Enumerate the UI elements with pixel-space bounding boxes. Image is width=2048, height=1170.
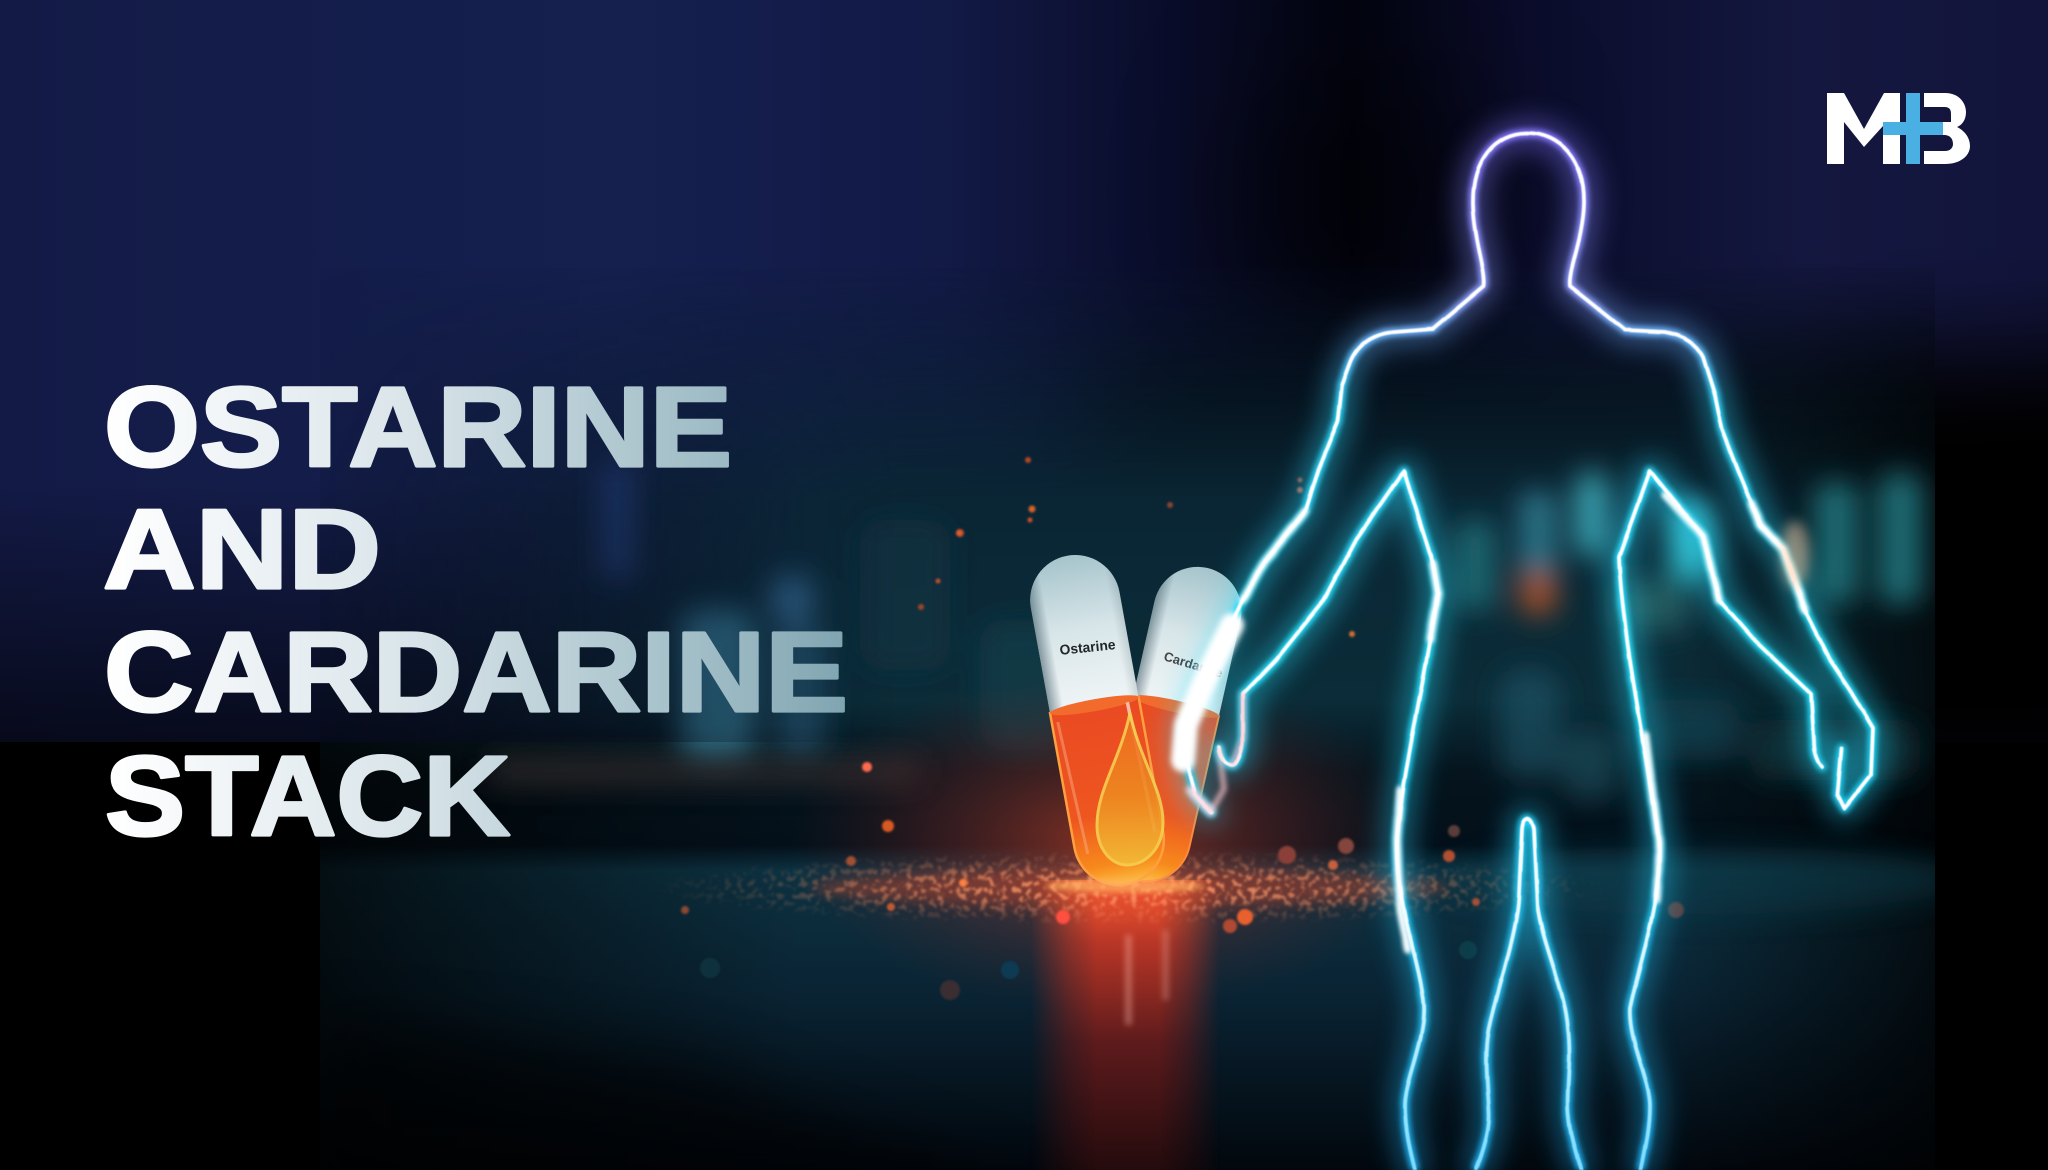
capsule reflection on the floor	[1030, 880, 1220, 1170]
logo blue plus	[1883, 93, 1943, 164]
title: STACK	[105, 733, 510, 859]
logo letter B	[1924, 93, 1970, 164]
title	[103, 364, 848, 859]
blurred bottles	[600, 460, 1922, 800]
capsule labels	[1059, 636, 1225, 681]
title: CARDARINE	[104, 609, 848, 735]
capsule: Ostarine	[1023, 548, 1171, 892]
glitter band on floor	[676, 853, 1570, 923]
inner golden teardrop	[1097, 713, 1163, 865]
capsule labels: Cardarine	[1162, 649, 1225, 681]
neon human body outline	[1183, 133, 1873, 1170]
capsule labels: Ostarine	[1059, 636, 1116, 658]
floor hot spot under capsule	[1045, 879, 1205, 893]
glow: near halo	[1183, 133, 1873, 1170]
diagonal shadow bottom-left	[448, 1054, 829, 1152]
hand and capsule flare	[1183, 625, 1243, 812]
floor sheen	[1551, 840, 1935, 912]
warm flare on right arm	[1781, 521, 1809, 589]
logo: M+B	[1827, 93, 1970, 164]
glow: wide halo	[1183, 133, 1873, 1170]
title: AND	[103, 486, 381, 612]
logo letter M	[1827, 93, 1900, 164]
photo background: blurred laboratory shelf and floor	[320, 268, 1960, 1170]
bright thick sections	[1243, 495, 1805, 950]
red glow around capsules	[790, 670, 1430, 1010]
warm shelf band	[490, 758, 920, 784]
title: OSTARINE	[104, 364, 732, 490]
white core line	[1183, 133, 1873, 1170]
capsule: Cardarine	[1094, 558, 1250, 890]
bokeh sparks	[681, 457, 1684, 1000]
